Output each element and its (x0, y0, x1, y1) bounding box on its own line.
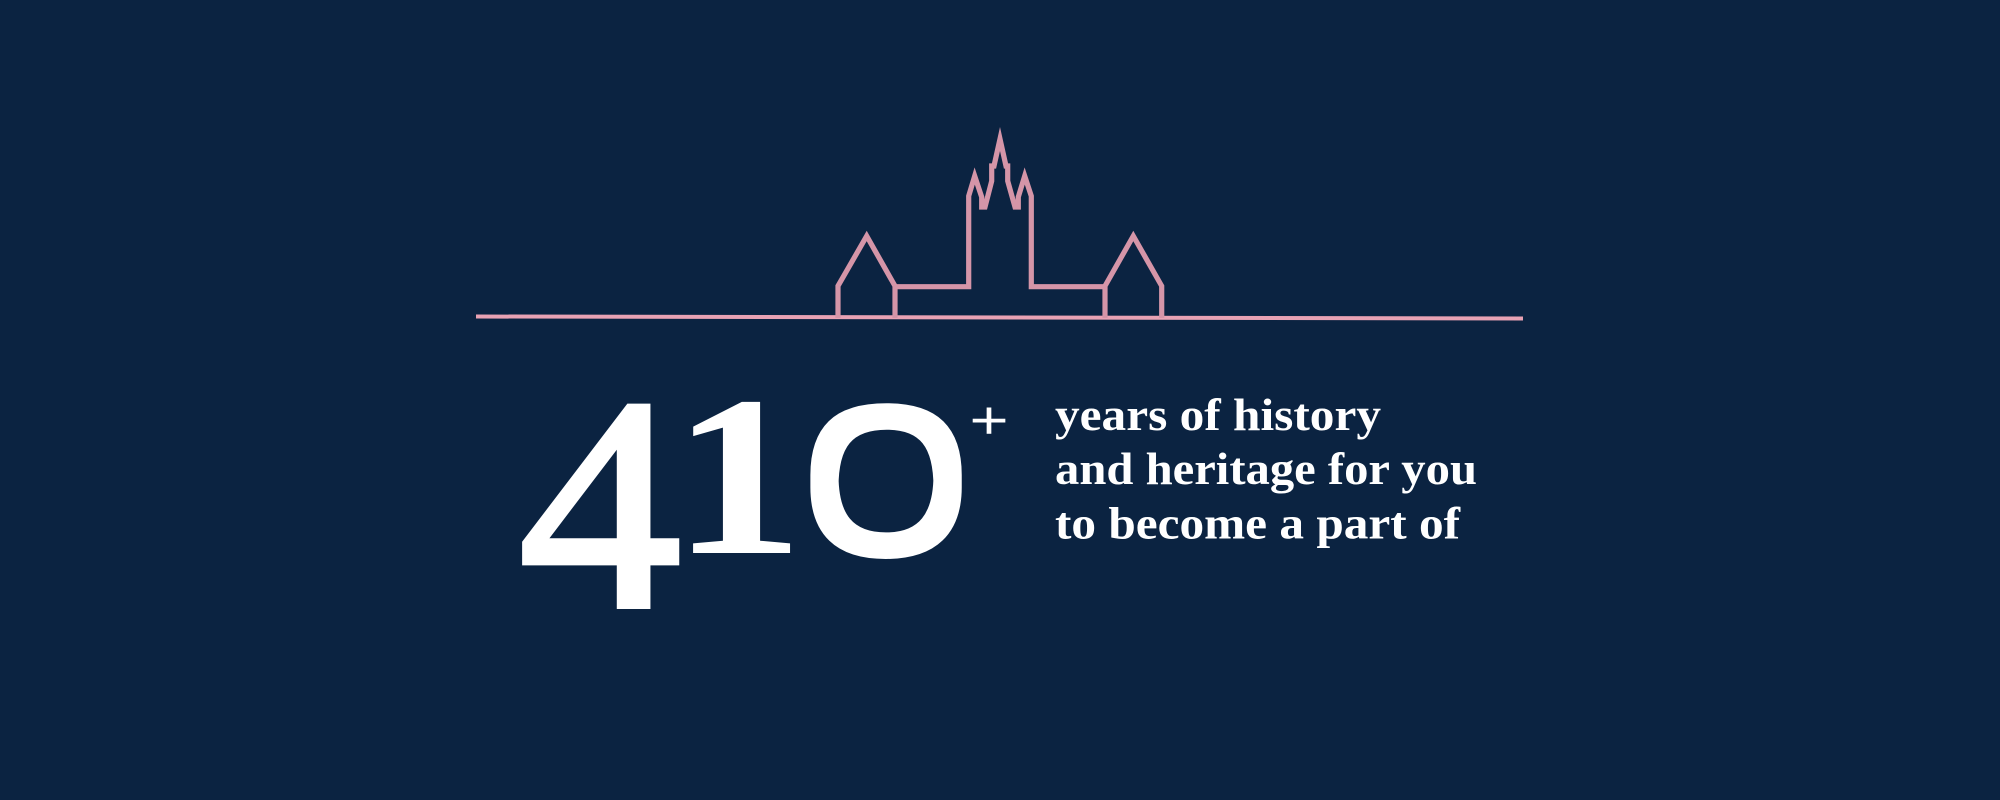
ground line (476, 316, 1523, 318)
line 2: and heritage for you (1055, 443, 1477, 494)
central tower with spires and wings (895, 139, 1105, 287)
right house (1105, 236, 1162, 318)
line 1: years of history (1055, 389, 1381, 440)
description text (1055, 389, 1477, 548)
digit 1: 1 (672, 350, 804, 603)
digit 4: 4 (519, 336, 681, 672)
big number 410+ (519, 336, 1008, 672)
left house (838, 236, 895, 318)
plus sign: + (970, 390, 1008, 450)
digit 0: 0 (798, 368, 974, 595)
castle skyline illustration (476, 139, 1523, 318)
line 3: to become a part of (1055, 498, 1461, 548)
